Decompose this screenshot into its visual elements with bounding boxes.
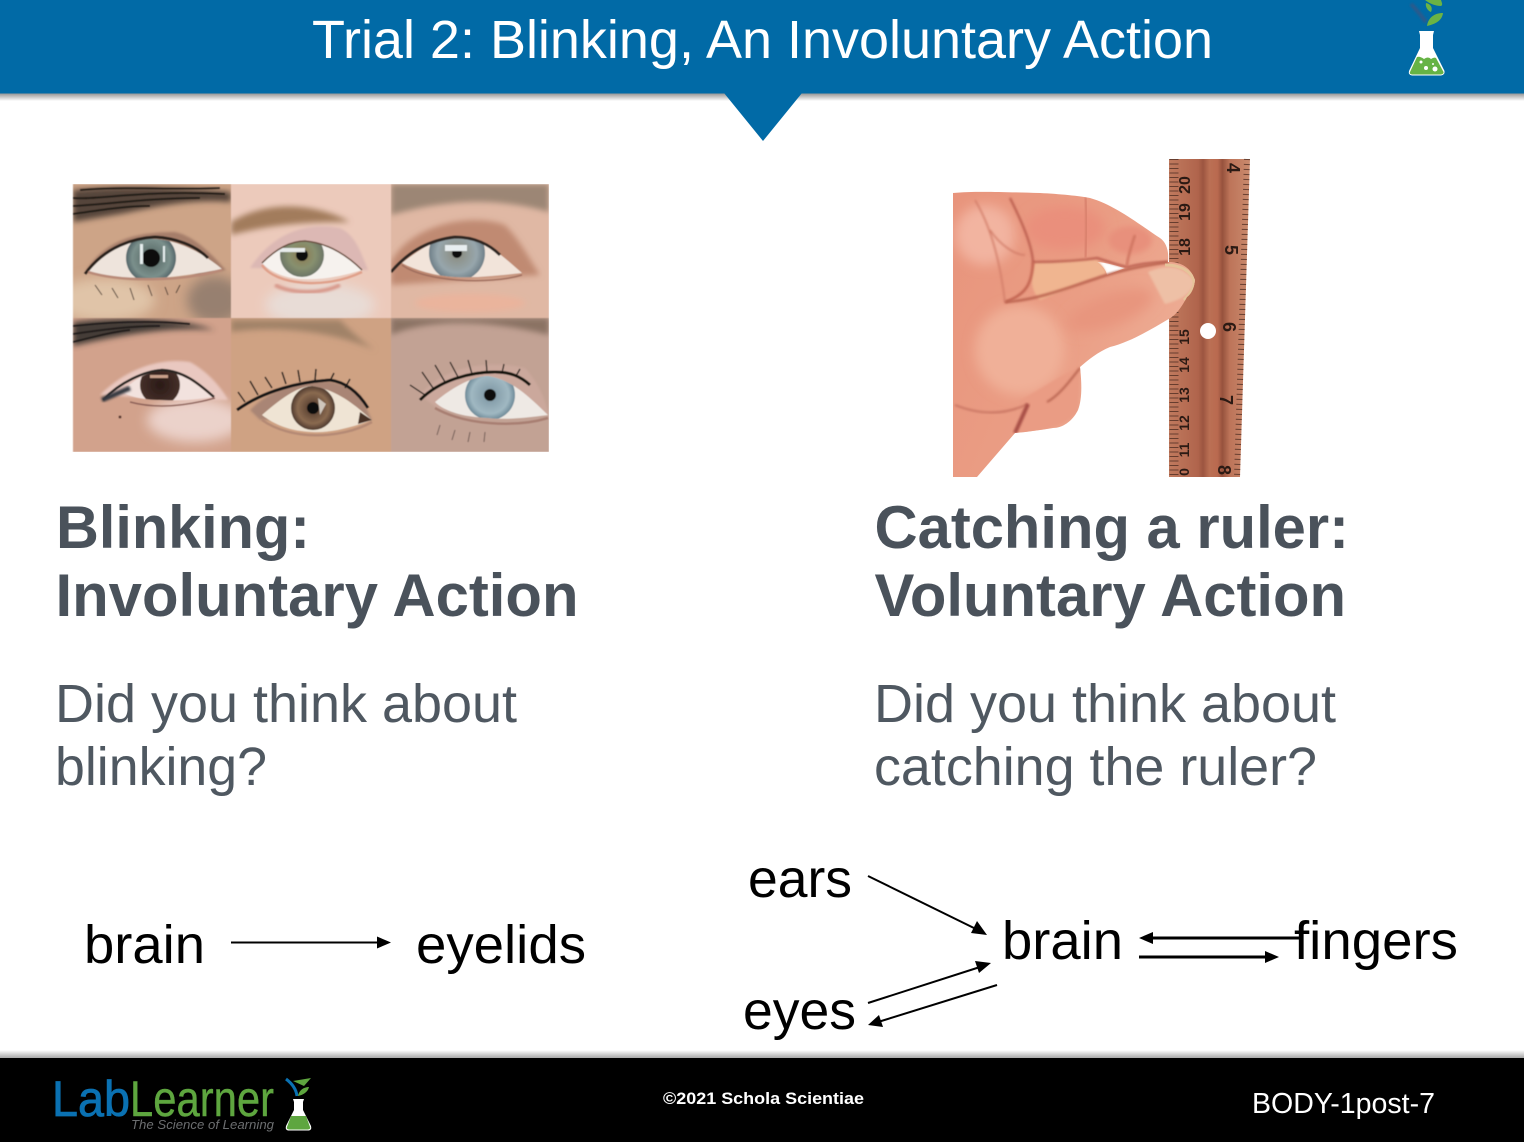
title: Trial 2: Blinking, An Involuntary Action bbox=[312, 10, 1213, 70]
ruler centimetre numbers: 0 bbox=[1176, 468, 1192, 476]
ruler inch numbers bbox=[1214, 163, 1243, 475]
right diagram: sensory and motor pathway: ears bbox=[748, 849, 852, 909]
right diagram: sensory and motor pathway bbox=[743, 849, 1458, 1041]
right panel: catching heading: Voluntary Action bbox=[874, 562, 1346, 629]
ruler centimetre numbers: 15 bbox=[1176, 329, 1192, 345]
ruler centimetre numbers: 19 bbox=[1177, 203, 1194, 221]
ruler inch numbers: 4 bbox=[1223, 163, 1243, 173]
ruler inch numbers: 8 bbox=[1214, 465, 1234, 475]
eye photo 3 bbox=[391, 184, 549, 318]
ruler inch numbers: 5 bbox=[1221, 245, 1241, 255]
ruler inch numbers: 7 bbox=[1216, 395, 1236, 405]
left panel: blinking heading: Blinking: bbox=[56, 494, 310, 561]
ruler centimetre numbers: 20 bbox=[1177, 176, 1194, 194]
eye photo 2 bbox=[231, 184, 391, 327]
hand bbox=[950, 190, 1200, 480]
right diagram: sensory and motor pathway: eyes bbox=[743, 981, 856, 1041]
left panel: question text: Did you think about bbox=[55, 674, 517, 734]
ruler inch numbers: 6 bbox=[1219, 322, 1239, 332]
left panel: question text bbox=[55, 674, 517, 797]
icon: flask logo in header bbox=[1409, 0, 1445, 76]
ruler centimetre numbers: 12 bbox=[1176, 415, 1192, 431]
header banner bbox=[0, 0, 1524, 141]
right panel: question text bbox=[874, 674, 1336, 797]
eye photo 5 bbox=[231, 318, 391, 452]
right diagram: sensory and motor pathway: fingers bbox=[1294, 911, 1458, 971]
ruler centimetre numbers: 14 bbox=[1176, 357, 1192, 373]
eye photo 4 bbox=[73, 318, 243, 452]
eye photo 6 bbox=[391, 318, 549, 452]
arrow: eyes to brain bbox=[868, 961, 991, 1003]
left diagram: brain to eyelids: brain bbox=[84, 915, 205, 975]
arrow: ears to brain bbox=[868, 876, 987, 935]
right panel: catching heading: Catching a ruler: bbox=[874, 494, 1349, 561]
right panel: question text: catching the ruler? bbox=[874, 737, 1317, 797]
arrow: brain to fingers bbox=[1139, 951, 1279, 963]
ruler centimetre numbers bbox=[1176, 176, 1194, 476]
right diagram: sensory and motor pathway: brain bbox=[1002, 911, 1123, 971]
footer slide code: BODY-1post-7 bbox=[1252, 1088, 1435, 1120]
photo: hand pinching ruler bbox=[950, 159, 1250, 480]
right panel: catching heading bbox=[874, 494, 1349, 629]
footer logo: LabLearner: The Science of Learning bbox=[131, 1117, 275, 1132]
left panel: question text: blinking? bbox=[55, 737, 267, 797]
left diagram: brain to eyelids bbox=[84, 915, 586, 975]
left panel: blinking heading bbox=[56, 494, 578, 629]
arrow: fingers to brain bbox=[1139, 932, 1300, 944]
icon: footer flask bbox=[286, 1078, 311, 1130]
ruler centimetre numbers: 18 bbox=[1177, 238, 1194, 256]
footer logo: LabLearner: Lab bbox=[52, 1071, 130, 1127]
left diagram: brain to eyelids: eyelids bbox=[416, 915, 586, 975]
left panel: blinking heading: Involuntary Action bbox=[56, 562, 578, 629]
footer logo: LabLearner: Learner bbox=[130, 1071, 274, 1127]
footer bar bbox=[0, 1050, 1524, 1142]
photo: six eyes grid bbox=[55, 184, 549, 452]
eye photo 1 bbox=[72, 184, 232, 319]
ruler centimetre numbers: 11 bbox=[1176, 442, 1192, 457]
ruler centimetre numbers: 13 bbox=[1176, 387, 1192, 403]
arrow: brain to eyes bbox=[868, 985, 997, 1027]
footer copyright: ©2021 Schola Scientiae bbox=[663, 1089, 864, 1108]
right panel: question text: Did you think about bbox=[874, 674, 1336, 734]
footer logo: LabLearner bbox=[52, 1071, 311, 1132]
ruler bbox=[1169, 159, 1250, 477]
